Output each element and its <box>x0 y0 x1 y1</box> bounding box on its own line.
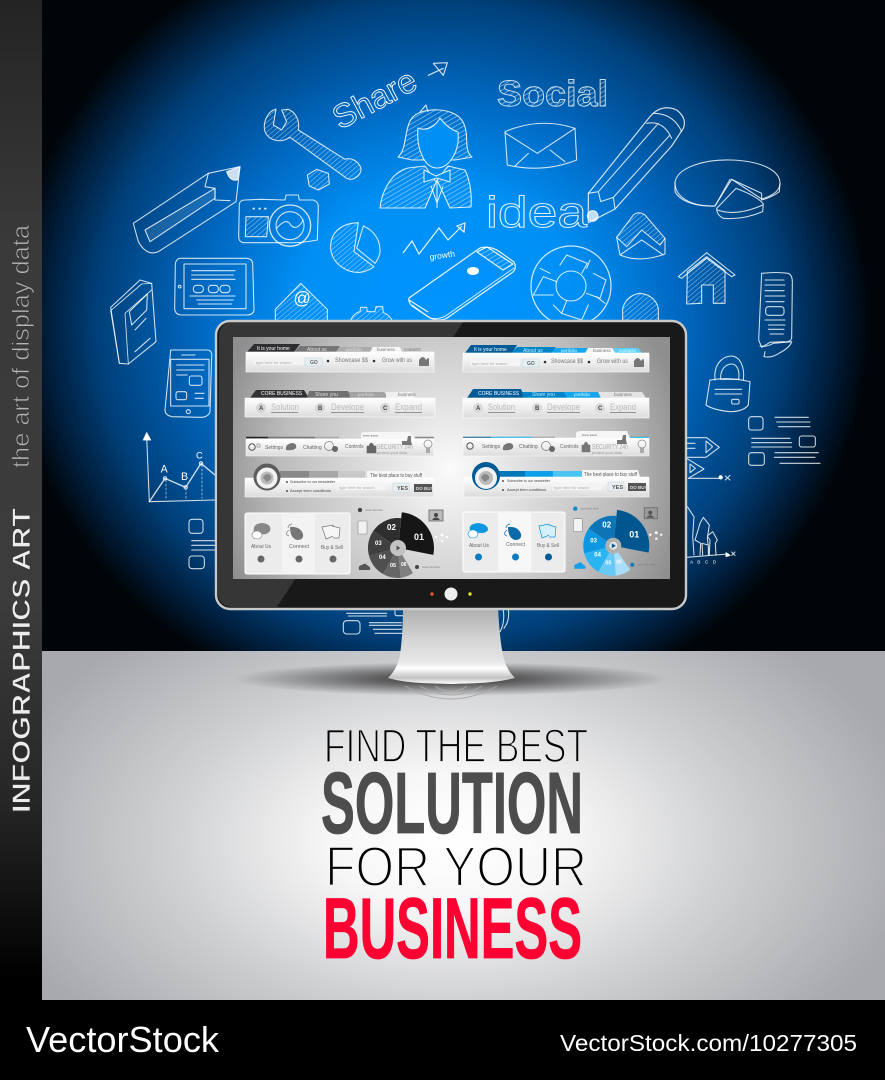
nav bar 1 blue: type here for search <box>472 361 508 366</box>
doodle: text blocks <box>749 417 820 465</box>
doodle: small content boxes <box>189 519 215 569</box>
doodle: pie chart <box>331 223 380 272</box>
nav bar 4 blue: DO BUY <box>630 485 648 490</box>
segmented pie blue: 03 <box>590 539 598 545</box>
segmented pie blue: 05 <box>605 561 611 567</box>
segmented pie blue: 01 <box>629 530 639 540</box>
headline: FIND THE BEST: FIND THE BEST <box>324 719 588 772</box>
segmented pie blue: 02 <box>602 521 612 530</box>
nav bar 1 blue: About us <box>523 348 543 354</box>
nav bar 1 grey: business <box>377 347 396 352</box>
doodle: at-mail envelope <box>275 283 327 323</box>
doodle: upward arrows chart <box>687 507 735 564</box>
handwritten word: idea: idea <box>486 188 588 237</box>
nav bar 4 blue: type here for search <box>554 485 590 490</box>
nav bar 1 grey: Grow with us <box>382 357 413 364</box>
segmented pie grey: 01 <box>414 532 424 542</box>
nav bar 2 grey: CORE BUSINESS <box>261 391 303 397</box>
nav bar 3 grey: Chatting <box>303 445 322 451</box>
headline: BUSINESS: BUSINESS <box>323 881 582 977</box>
nav bar 2 blue: Solution <box>488 402 515 412</box>
icon panel grey: Connect <box>289 544 310 550</box>
nav bar 1 blue: Grow with us <box>597 358 629 365</box>
nav bar 2 blue: business <box>614 392 633 397</box>
nav bar 4 blue: Subscribe to our newsletter <box>507 478 551 483</box>
doodle: large pencil <box>587 108 684 223</box>
nav bar 2 blue: B <box>535 406 540 412</box>
nav bar 2 grey: business <box>398 392 417 397</box>
doodle cluster: right side <box>687 272 820 564</box>
footer image reference: VectorStock.com/10277305 <box>560 1030 857 1056</box>
icon panel grey: About Us <box>251 544 271 550</box>
nav bar 4 blue: Accept term conditions <box>507 487 546 492</box>
blue backdrop <box>42 0 885 651</box>
segmented pie grey: 05 <box>390 563 396 569</box>
doodle: ABC line chart: B <box>181 471 188 483</box>
icon panel blue: Connect <box>506 542 526 548</box>
segmented pie grey: more info here <box>365 508 383 512</box>
monitor shadow <box>233 662 669 699</box>
nav bar 4 grey: Subscribe to our newsletter <box>290 479 336 484</box>
sidebar tagline: the art of display data <box>8 224 35 468</box>
segmented pie grey: more info here <box>422 565 440 569</box>
screen content: blue column <box>463 345 662 576</box>
nav bar 4 blue: YES <box>612 485 623 491</box>
doodle cluster: left top <box>133 63 447 323</box>
nav bar 1 blue: business <box>593 348 612 353</box>
nav bar 1 grey: portfolio <box>346 347 363 352</box>
nav bar 4 grey: The best place to buy stuff <box>370 473 423 479</box>
monitor <box>216 321 686 684</box>
doodle: upward arrows chart: A B C D <box>690 559 717 564</box>
nav bar 2 blue: portfolio <box>574 392 591 397</box>
nav bar 2 blue: Share you <box>532 392 555 398</box>
icon panel grey: Buy & Sell <box>321 545 343 551</box>
footer band <box>0 1000 885 1080</box>
doodle: ABC line chart: A <box>161 463 169 475</box>
doodle: disc infographic <box>531 246 611 326</box>
doodle cluster: right top <box>505 108 780 326</box>
nav bar 1 grey: type here for search <box>256 360 292 365</box>
nav bar 3 grey <box>246 432 434 456</box>
doodle: book <box>111 280 156 364</box>
nav bar 2 grey: A <box>259 406 264 412</box>
headline <box>321 719 588 977</box>
nav bar 2 blue <box>463 389 649 418</box>
doodle: tag arrows <box>687 438 730 480</box>
doodle cluster: left side <box>111 280 215 569</box>
nav bar 1 grey <box>246 344 434 372</box>
nav bar 2 grey: B <box>318 406 323 412</box>
nav bar 2 grey: C <box>383 406 388 412</box>
doodle: pencil left <box>133 167 240 253</box>
nav bar 4 grey: DO BUY <box>416 486 434 491</box>
icon panel blue <box>463 512 565 572</box>
doodle: tool at monitor top <box>350 307 393 322</box>
nav bar 3 blue: lorem ipsum <box>582 433 598 437</box>
nav bar 2 grey: portfolio <box>358 392 375 397</box>
nav bar 2 grey: Share you <box>315 392 338 398</box>
nav bar 1 grey: GO <box>310 360 318 366</box>
segmented pie grey: 06 <box>401 562 407 568</box>
segmented pie blue: more info here <box>637 563 656 567</box>
nav bar 2 blue: Develope <box>547 402 580 412</box>
doodle: smartphone <box>409 247 515 320</box>
nav bar 1 blue: It is your home <box>474 347 507 353</box>
nav bar 1 grey: Showcase $$ <box>335 357 368 364</box>
nav bar 3 blue: protect your data <box>592 450 623 455</box>
footer logo: VectorStock <box>26 1019 220 1060</box>
nav bar 3 grey: Controls <box>345 444 364 450</box>
nav bar 3 grey: lorem ipsum <box>363 434 379 438</box>
nav bar 1 blue: GO <box>527 361 535 367</box>
headline: SOLUTION: SOLUTION <box>321 755 583 852</box>
nav bar 2 grey: Develope <box>331 402 364 412</box>
nav bar 2 grey: Expand <box>395 402 422 412</box>
nav bar 4 blue: The best place to buy stuff <box>584 472 638 478</box>
nav bar 2 grey: Solution <box>271 402 299 412</box>
headline: FOR YOUR: FOR YOUR <box>325 835 587 899</box>
nav bar 4 grey: YES <box>397 486 408 492</box>
icon panel grey <box>245 513 350 574</box>
nav bar 2 grey <box>245 390 435 417</box>
grey floor <box>42 651 885 1000</box>
nav bar 4 grey: Accept term conditions <box>290 488 331 493</box>
sidebar title: INFOGRAPHICS ART <box>8 508 36 813</box>
nav bar 3 grey: protect your data <box>377 450 408 455</box>
yellow indicator <box>468 592 472 596</box>
doodle: business woman <box>380 105 472 208</box>
nav bar 2 blue: C <box>598 406 603 412</box>
screen content: greyscale column <box>245 344 448 578</box>
handwritten word: Share: Share <box>326 61 423 136</box>
doodle: 3D pie chart <box>675 160 780 219</box>
nav bar 3 blue: SECURITY 24h <box>592 444 628 451</box>
nav bar 2 blue: A <box>476 406 481 412</box>
doodle: text lines and box <box>343 608 405 634</box>
nav bar 3 grey: Settings <box>265 445 284 451</box>
nav bar 2 blue: CORE BUSINESS <box>478 391 520 397</box>
nav bar 3 blue: Chatting <box>519 444 538 450</box>
monitor stand <box>388 606 515 684</box>
doodle: share arrow <box>428 63 447 75</box>
handwritten word: Social: Social <box>497 73 608 114</box>
segmented pie blue: 04 <box>594 553 602 559</box>
doodle: camera <box>239 195 318 246</box>
nav bar 1 blue: contacts <box>619 348 637 353</box>
doodle cluster: below monitor <box>343 608 509 634</box>
monitor screen <box>233 337 670 579</box>
bezel gloss <box>218 322 463 607</box>
doodle: small envelope at monitor top <box>623 293 658 322</box>
doodle: ABC line chart <box>143 433 215 502</box>
nav bar 3 blue: Controls <box>560 444 579 450</box>
doodle: growth chart <box>403 223 465 262</box>
nav bar 2 blue: Expand <box>610 402 636 412</box>
nav bar 1 blue: Showcase $$ <box>551 358 583 365</box>
monitor bezel <box>216 321 686 609</box>
segmented pie blue <box>573 506 662 576</box>
doodle: at-mail envelope: @ <box>293 288 311 308</box>
nav bar 1 blue <box>463 345 649 372</box>
doodle: envelope <box>505 123 577 168</box>
doodle: speech note <box>759 272 792 357</box>
nav bar 4 grey: type here for search <box>339 485 375 490</box>
segmented pie grey: 03 <box>375 541 382 547</box>
nav bar 3 grey: SECURITY 24h <box>377 444 413 451</box>
nav bar 3 blue: Settings <box>482 444 501 450</box>
doodle: cord <box>500 610 509 632</box>
growth label: growth <box>429 248 456 262</box>
nav bar 1 grey: About us <box>307 347 327 353</box>
power button <box>444 588 458 600</box>
doodle: nut <box>307 169 329 190</box>
segmented pie blue: 06 <box>616 560 622 566</box>
doodle: phone <box>165 350 212 417</box>
left sidebar <box>0 0 42 1000</box>
doodle: tablet <box>175 258 254 315</box>
nav bar 3 blue <box>463 431 649 456</box>
nav bar 1 grey: contacts <box>404 347 422 352</box>
nav bar 4 grey <box>245 464 434 497</box>
segmented pie grey <box>358 508 448 578</box>
doodle: house <box>678 253 735 304</box>
nav bar 1 grey: It is your home <box>257 346 290 352</box>
doodle: padlock <box>706 356 750 412</box>
segmented pie grey: 02 <box>387 523 396 532</box>
doodle: wrench <box>264 109 361 179</box>
icon panel blue: About Us <box>469 543 489 549</box>
doodle: open envelope <box>617 213 665 259</box>
icon panel blue: Buy & Sell <box>537 543 559 549</box>
doodle: ABC line chart: C <box>196 450 203 460</box>
red indicator <box>430 592 434 596</box>
segmented pie grey: 04 <box>379 555 386 561</box>
nav bar 1 blue: portfolio <box>561 348 578 353</box>
segmented pie blue: more info here <box>580 507 599 511</box>
nav bar 4 blue <box>464 462 649 497</box>
